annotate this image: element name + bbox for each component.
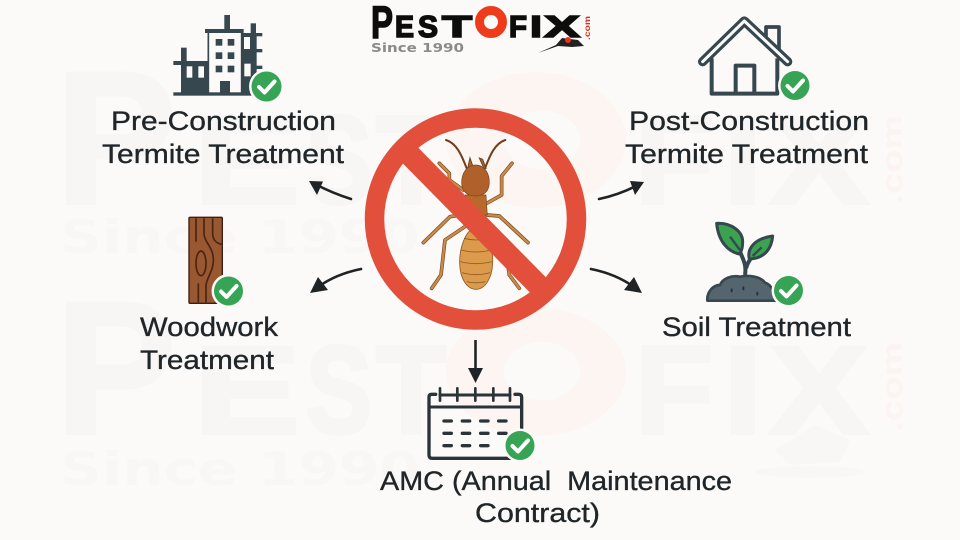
arrow: to soil: [591, 269, 642, 293]
label: AMC: AMC (Annual Maintenance: [380, 466, 732, 496]
label: post-construction: Termite Treatment: [625, 139, 869, 169]
watermark: top logo: T: [376, 92, 446, 230]
label: post-construction: Post-Construction: [629, 106, 869, 136]
watermark: bottom logo: F: [635, 322, 713, 460]
watermark: top logo: .com: [876, 115, 909, 205]
check badge: [212, 274, 246, 308]
icon: calendar: [429, 388, 537, 462]
watermark: bottom logo: S: [306, 322, 372, 460]
watermark: top logo: I: [724, 92, 762, 230]
watermark: top logo: F: [635, 92, 713, 230]
icon: building: [173, 15, 284, 104]
arrow: to post-construction: [599, 181, 644, 199]
logo: Pestofix: I: [530, 9, 542, 44]
watermark: bottom logo: E: [194, 322, 300, 460]
icon: no-termite sign: [374, 118, 576, 320]
watermark: bottom logo: I: [724, 322, 762, 460]
watermark: bottom logo: P: [56, 263, 176, 473]
label: pre-construction: [102, 106, 345, 169]
logo: Pestofix: [371, 0, 592, 55]
icon: house: [703, 21, 812, 103]
icon: soil and sprout: [707, 223, 806, 308]
logo: Pestofix: .com: [583, 16, 592, 40]
watermark: top logo: E: [194, 92, 300, 230]
label: pre-construction: Pre-Construction: [111, 106, 336, 136]
label: AMC: Contract): [475, 498, 600, 528]
label: soil: Soil Treatment: [662, 312, 852, 342]
logo: Pestofix: X: [544, 9, 581, 44]
arrow: to AMC: [468, 340, 483, 383]
logo: Pestofix: S: [418, 9, 438, 44]
watermark: top logo: P: [56, 33, 176, 243]
logo: Pestofix: E: [395, 9, 414, 44]
check badge: [249, 69, 284, 104]
logo: Pestofix: F: [509, 9, 527, 44]
watermark: top logo: S: [306, 92, 372, 230]
logo: Pestofix: T: [442, 9, 472, 44]
check badge: [778, 68, 812, 102]
watermark: top logo: [56, 33, 909, 264]
termite: [423, 140, 528, 289]
arrow: to woodwork: [310, 269, 361, 293]
arrow: to pre-construction: [309, 181, 351, 199]
label: woodwork: [140, 312, 279, 375]
watermark: bottom logo: Since 1990: [60, 442, 420, 496]
watermark: bottom logo: .com: [876, 342, 909, 432]
watermark: top logo: X: [770, 92, 868, 230]
label: pre-construction: Termite Treatment: [102, 139, 345, 169]
check badge: [503, 428, 537, 462]
watermark: top logo: Since 1990: [60, 210, 420, 264]
check badge: [772, 274, 806, 308]
label: woodwork: Woodwork: [140, 312, 279, 342]
label: AMC: [380, 466, 732, 528]
logo: Pestofix: Since 1990: [371, 40, 464, 55]
label: woodwork: Treatment: [140, 345, 275, 375]
watermark: bottom logo: X: [770, 322, 868, 460]
watermark: bottom logo: T: [376, 322, 446, 460]
label: post-construction: [625, 106, 869, 169]
icon: wood plank: [189, 217, 246, 308]
watermark: bottom logo: [56, 263, 909, 496]
